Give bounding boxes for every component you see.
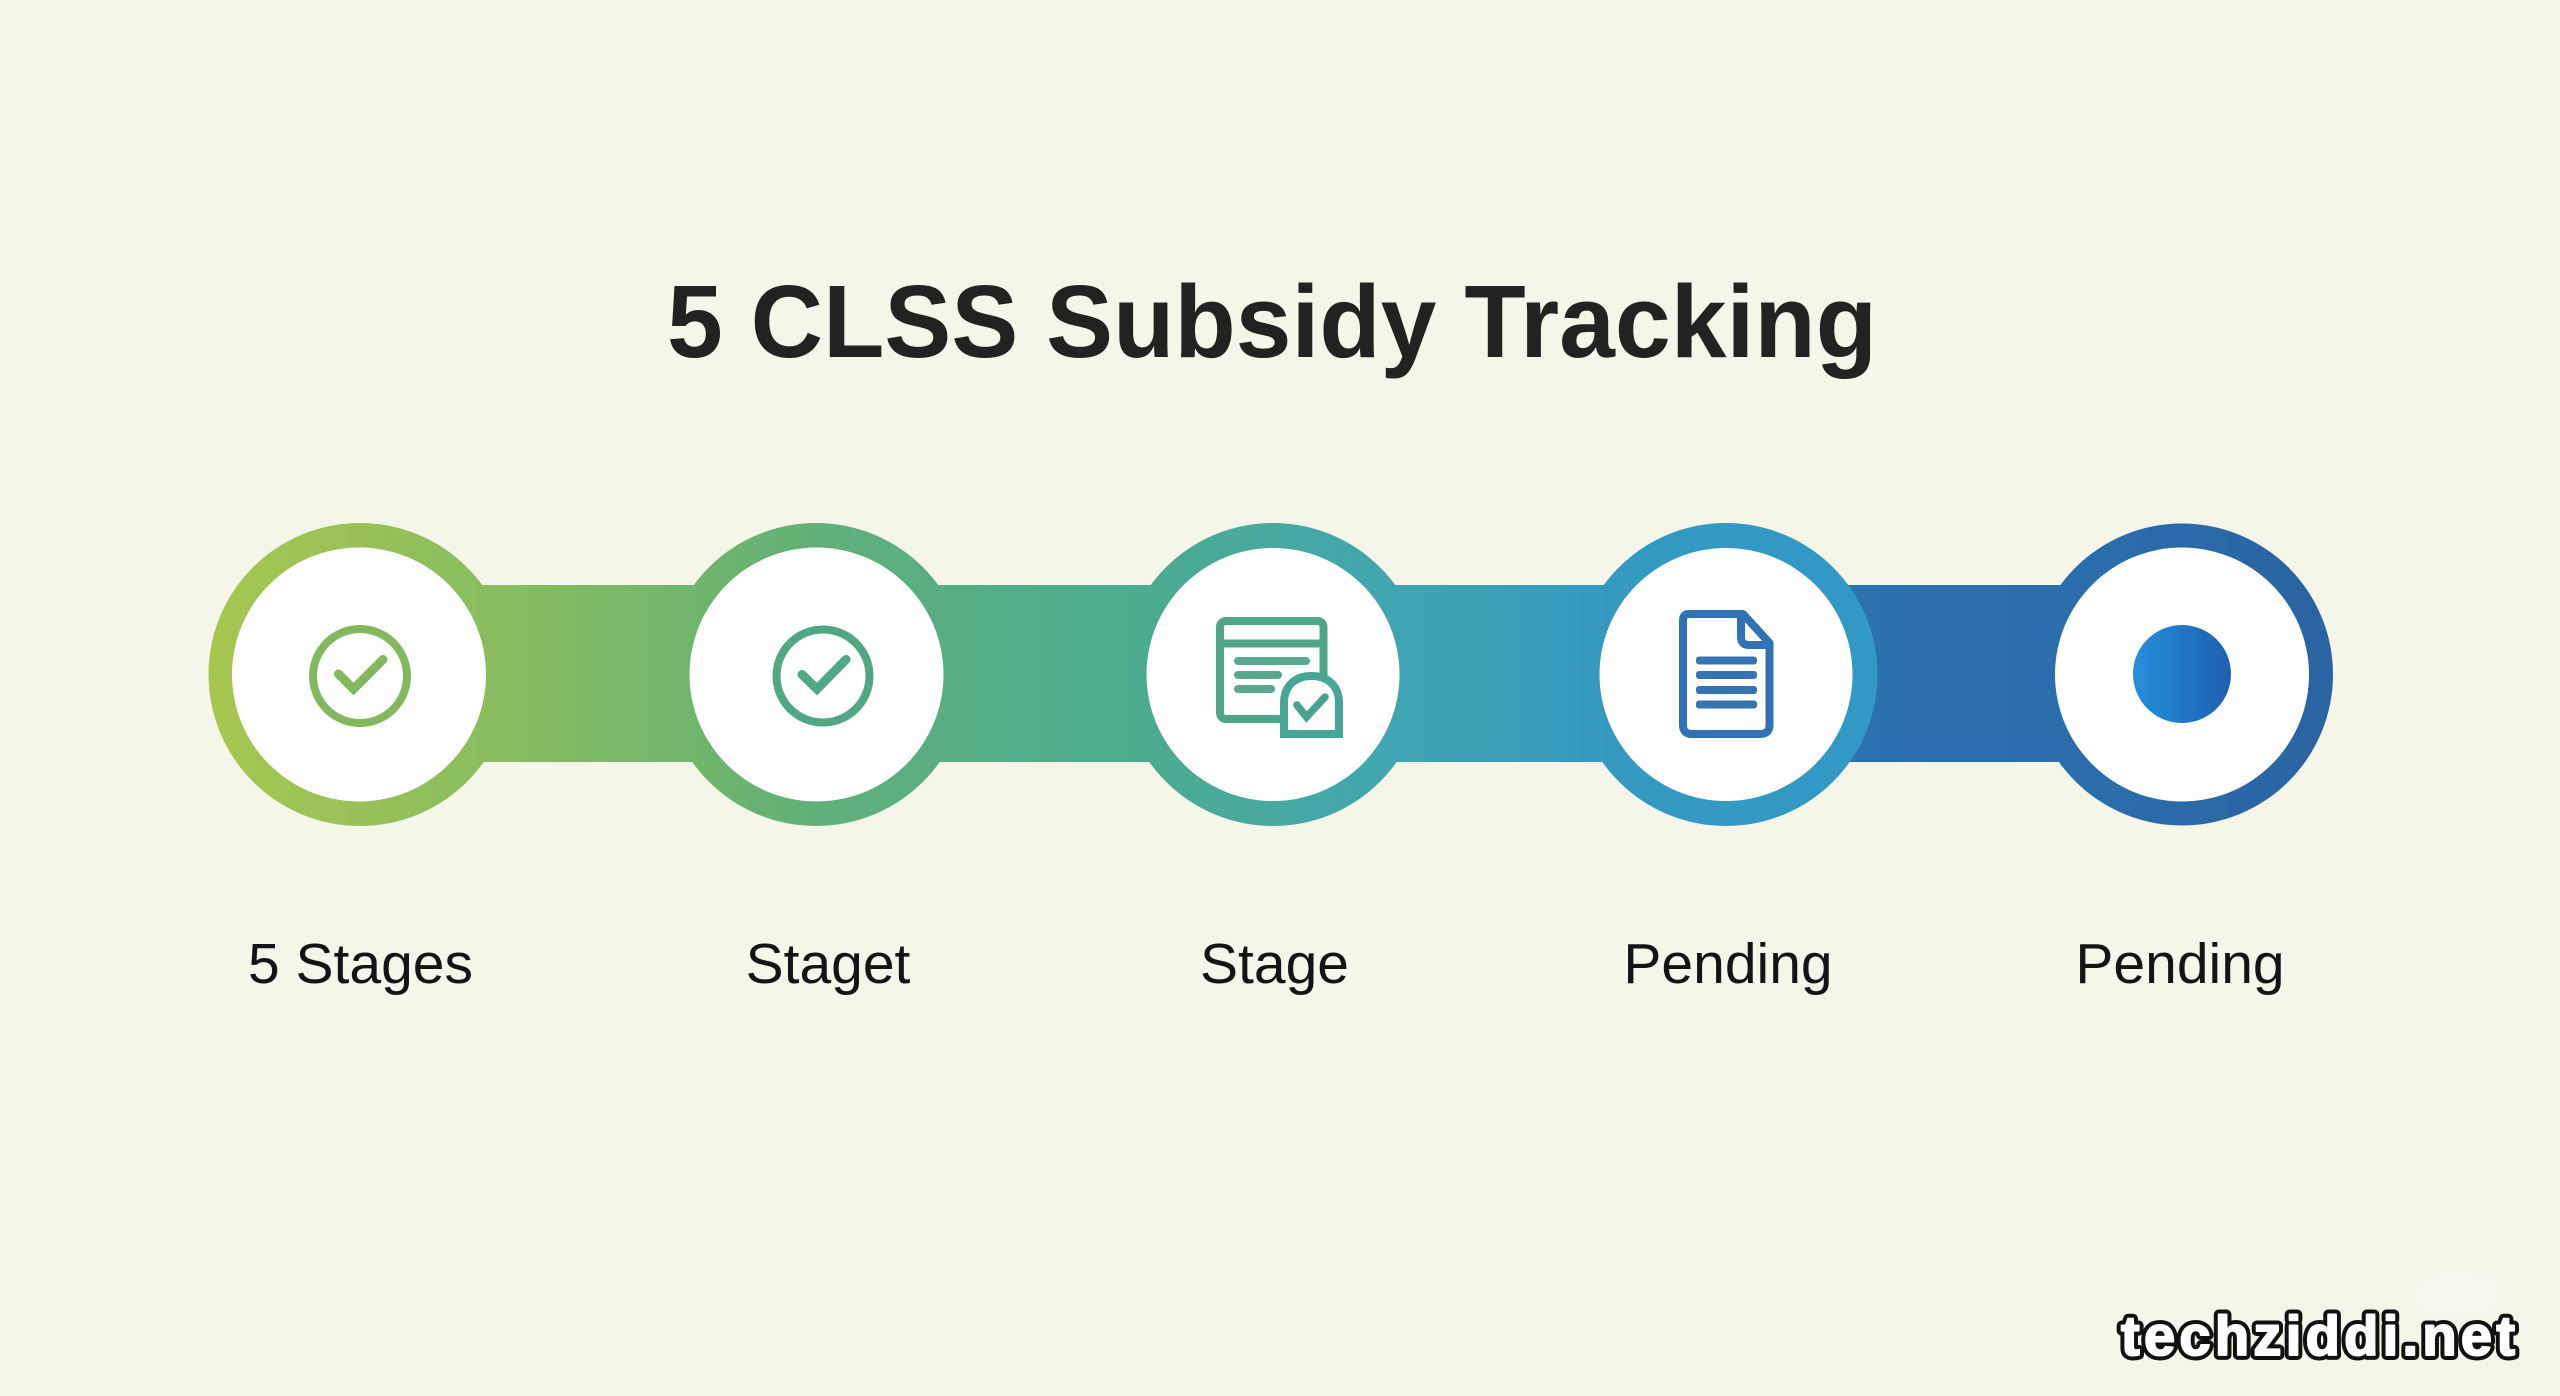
icon: check circle bbox=[776, 630, 870, 722]
label: stage 5: Pending bbox=[2075, 932, 2285, 996]
watermark: techziddi.net bbox=[2121, 1304, 2515, 1367]
connector bar 2 bbox=[930, 585, 1160, 762]
label: stage 4: Pending bbox=[1623, 932, 1833, 996]
stage labels bbox=[248, 932, 2285, 996]
label: stage 1: 5 Stages bbox=[248, 932, 473, 996]
label: stage 3: Stage bbox=[1200, 932, 1349, 996]
connector bar 4 bbox=[1840, 585, 2070, 762]
label: stage 2: Staget bbox=[746, 932, 911, 996]
icon: check circle bbox=[313, 629, 407, 723]
stage 4 node bbox=[1574, 523, 1878, 826]
stage 2 node bbox=[664, 523, 968, 826]
connector bar 3 bbox=[1390, 585, 1620, 762]
connector bar 1 bbox=[470, 585, 700, 762]
icon: form with verified badge bbox=[1217, 621, 1339, 734]
title: 5 CLSS Subsidy Tracking bbox=[667, 264, 1877, 379]
progress track bbox=[208, 523, 2333, 826]
icon: document bbox=[1683, 614, 1770, 734]
watermark: techziddi.net bbox=[2121, 1304, 2515, 1367]
stage 5 node bbox=[2031, 524, 2333, 826]
stage 1 node bbox=[208, 523, 512, 826]
icon: status dot bbox=[2133, 625, 2231, 723]
stage 3 node bbox=[1122, 523, 1424, 826]
